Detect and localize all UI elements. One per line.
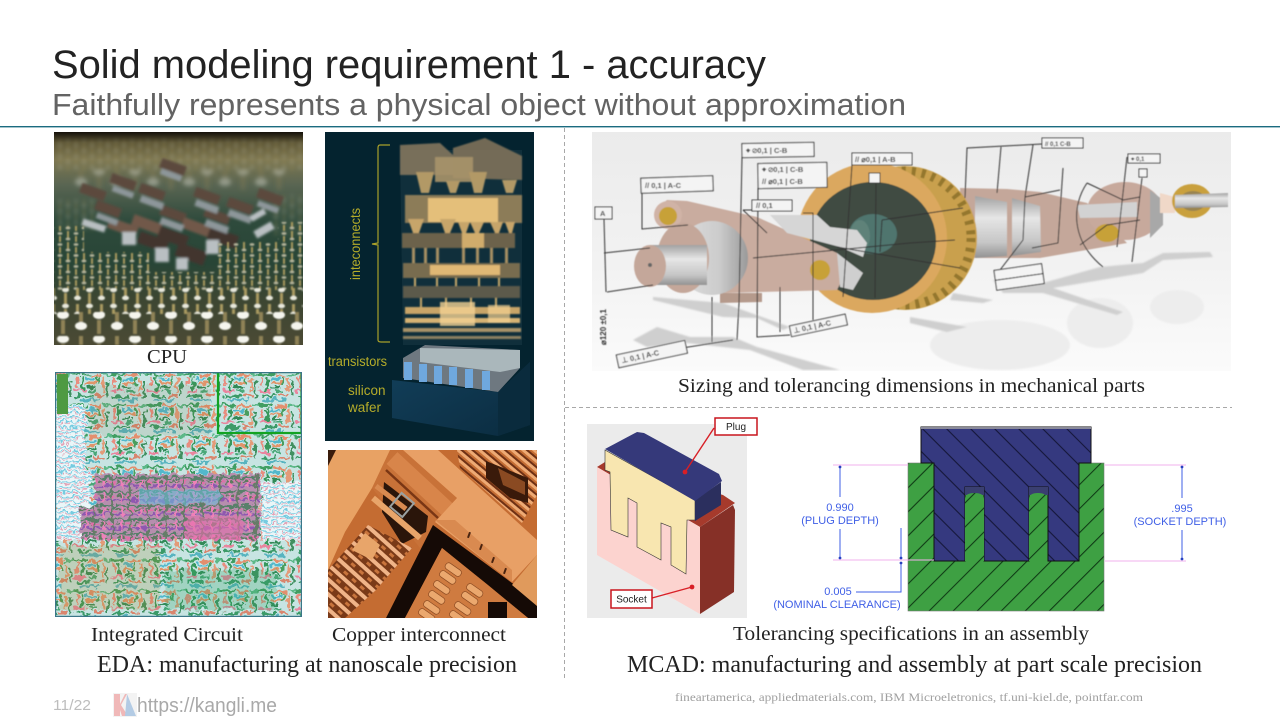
label: transistors: transistors xyxy=(328,354,387,369)
title: Solid modeling requirement 1 - accuracy xyxy=(52,43,766,87)
dimension: plug depth: 0.990 xyxy=(826,502,854,514)
interconnect layers xyxy=(400,138,522,339)
callout: socket xyxy=(611,585,694,608)
source credits: fineartamerica, appliedmaterials.com, IBM Microeletronics, tf.uni-kiel.de, pointfar.com xyxy=(675,690,1144,704)
caption: integrated circuit: Integrated Circuit xyxy=(91,624,243,646)
caption: copper interconnect: Copper interconnect xyxy=(332,624,506,646)
wafer block xyxy=(392,362,530,436)
feature control frames: // ⌀0,1 | A-B xyxy=(855,155,896,164)
feature control frames: ⊥ 0,1 | A-C xyxy=(793,318,832,335)
bracket xyxy=(372,145,390,342)
feature control frames: ⌖ 0,1 xyxy=(1130,157,1145,163)
feature control frames: ⌖ ⌀0,1 | C-B xyxy=(745,146,788,155)
feature control frames: // 0,1 xyxy=(756,201,773,210)
cast shadows xyxy=(633,252,1213,370)
rotated dimensions: ⌀120 ±0,1 xyxy=(599,309,608,345)
callout: socket: Socket xyxy=(616,594,647,606)
feature control frames: ⌖ ⌀0,1 | C-B xyxy=(761,165,804,174)
label: silicon wafer: wafer xyxy=(347,400,382,415)
caption: mechanical parts: Sizing and tolerancing dimensions in mechanical parts xyxy=(678,375,1145,397)
dimension: nominal clearance xyxy=(773,528,902,611)
transistor layer xyxy=(403,345,520,392)
socket prongs xyxy=(965,487,1048,561)
image: mechanical part with GD&T annotations xyxy=(592,132,1231,371)
feature control frames xyxy=(595,138,1160,368)
diagram: plug and socket cross-section with tolerances xyxy=(773,427,1226,611)
label: interconnects: inteconnects xyxy=(347,208,363,280)
right crank and shaft xyxy=(960,182,1228,258)
dimension: socket depth: (SOCKET DEPTH) xyxy=(1134,516,1226,528)
image: chip interconnect stack xyxy=(325,132,534,441)
dimension: socket depth: .995 xyxy=(1171,503,1193,515)
dimension: nominal clearance: (NOMINAL CLEARANCE) xyxy=(773,599,901,611)
socket xyxy=(597,462,735,614)
summary: EDA: EDA: manufacturing at nanoscale precision xyxy=(97,652,517,678)
image: copper interconnect micrograph xyxy=(328,450,537,625)
image: integrated circuit layout xyxy=(55,372,302,617)
header rule xyxy=(0,126,1280,127)
divider: vertical xyxy=(564,128,566,681)
feature control frames: ⊥ 0,1 | A-C xyxy=(621,348,661,365)
divider: horizontal xyxy=(565,406,1232,408)
panel: EDA photographs xyxy=(40,132,537,646)
page number: 11/22 xyxy=(53,698,91,714)
icon: KL logo xyxy=(113,693,137,717)
plug section xyxy=(921,427,1091,561)
dimension: nominal clearance: 0.005 xyxy=(824,586,852,598)
image: isometric plug and socket xyxy=(587,418,757,618)
feature control frames: A xyxy=(600,209,606,218)
feature control frames: // ⌀0,1 | C-B xyxy=(762,177,803,186)
summary: MCAD: MCAD: manufacturing and assembly at part scale precision xyxy=(627,652,1202,678)
dimension: socket depth xyxy=(1134,466,1226,560)
label: silicon wafer: silicon xyxy=(348,383,386,398)
feature control frames: // 0,1 | A-C xyxy=(645,181,682,190)
gear xyxy=(797,163,977,313)
extension lines xyxy=(833,465,1186,561)
caption: assembly tolerancing: Tolerancing specifications in an assembly xyxy=(733,623,1089,645)
dimension: plug depth: (PLUG DEPTH) xyxy=(801,515,879,527)
image: CPU photo xyxy=(54,132,303,345)
feature control frames: // 0,1 C-B xyxy=(1045,142,1071,148)
plug xyxy=(605,432,722,574)
subtitle: Faithfully represents a physical object without approximation xyxy=(52,87,906,122)
dimension: plug depth xyxy=(801,466,879,559)
website link: https://kangli.me xyxy=(137,695,277,717)
callout: plug: Plug xyxy=(726,422,746,433)
dimension lines xyxy=(604,144,1142,358)
socket section xyxy=(908,463,1104,611)
caption: CPU: CPU xyxy=(147,346,188,368)
callout: plug xyxy=(683,418,757,474)
left crank and shaft xyxy=(634,200,867,303)
